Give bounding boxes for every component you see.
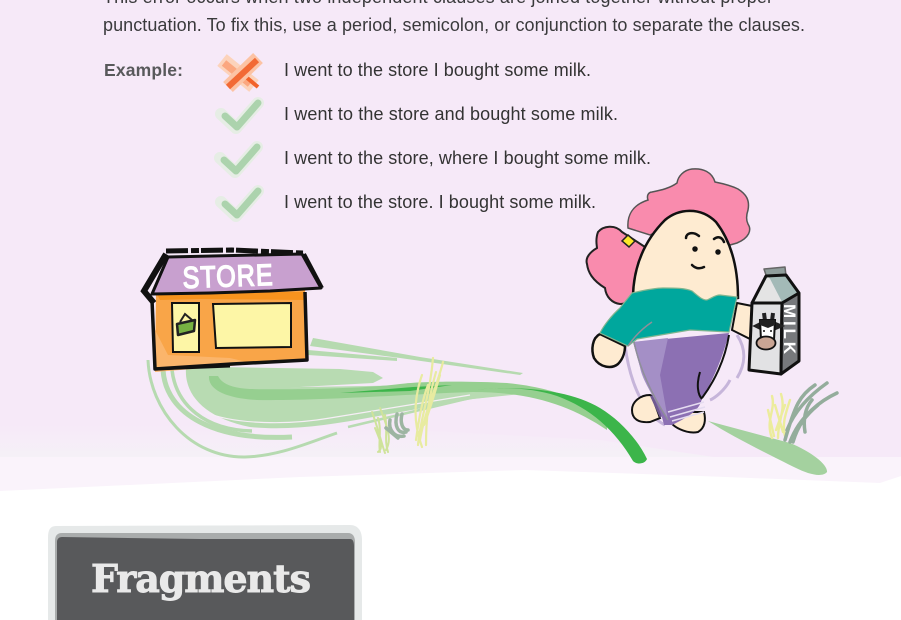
hand [592, 334, 625, 367]
path: green trail from store [148, 338, 647, 463]
store door [172, 303, 199, 352]
icon: check two [220, 147, 257, 172]
heading text: Fragments [91, 556, 311, 601]
trail from character's foot [708, 421, 827, 475]
hair: back bunch [587, 227, 645, 304]
milk carton [749, 267, 800, 374]
face [686, 233, 724, 268]
icon: cow face [755, 313, 782, 350]
store sign [177, 314, 195, 335]
right arm [732, 303, 752, 340]
grass: right tuft [768, 383, 837, 442]
store body [155, 288, 307, 369]
hair tie [622, 235, 635, 247]
sentence: correct example one: I went to the store and bought some milk. [284, 104, 618, 124]
text block: explanation: punctuation. To fix this, use a period, semicolon, or conjunction to separate the clauses. [103, 15, 805, 35]
heading: example label: Example: [104, 60, 183, 80]
text block: explanation [103, 0, 805, 35]
illustration: girl with milk [587, 169, 800, 432]
store window [213, 303, 291, 348]
icon: check three [221, 191, 258, 216]
icon: wrong cross [222, 58, 258, 87]
milk label: MILK [780, 304, 799, 355]
icon: check one [221, 103, 258, 128]
shirt [600, 288, 737, 346]
hair: main [628, 169, 750, 245]
left leg [632, 395, 660, 422]
right foot [668, 412, 705, 432]
panel: pink background [0, 0, 901, 491]
motion blur behind [625, 335, 744, 425]
store roof [152, 254, 321, 294]
store name: STORE [182, 258, 273, 295]
sentence: incorrect example: I went to the store I bought some milk. [284, 60, 591, 80]
trousers [633, 333, 729, 425]
section heading: fragments [48, 525, 362, 620]
illustration: store [144, 250, 322, 372]
grass: middle tuft [372, 358, 443, 453]
sentence: correct example three: I went to the store. I bought some milk. [284, 192, 596, 212]
head [633, 211, 738, 305]
sentence: correct example two: I went to the store, where I bought some milk. [284, 148, 651, 168]
